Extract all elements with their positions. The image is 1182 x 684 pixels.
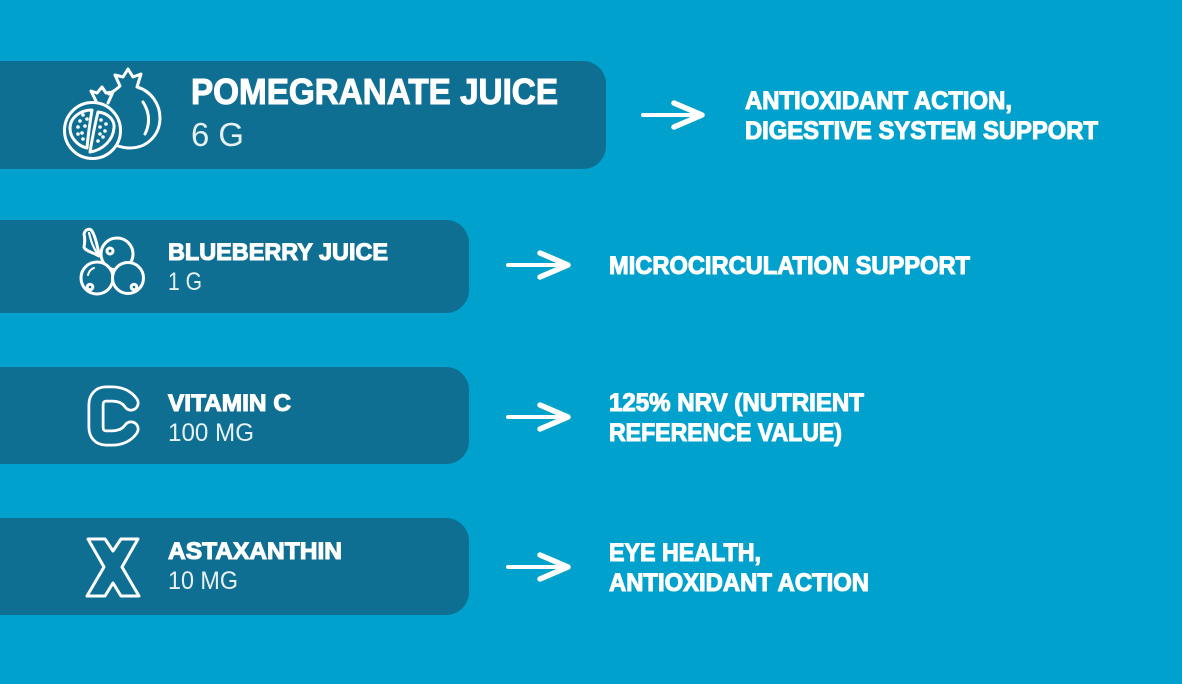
heading: vitamin c: VITAMIN C [168, 390, 291, 417]
benefit text: astaxanthin: EYE HEALTH, [609, 539, 761, 567]
dose: 10 mg: 10 MG [168, 567, 238, 595]
arrow: vitamin c benefit [508, 405, 568, 429]
panel: blueberry juice [0, 220, 469, 313]
heading: pomegranate juice: POMEGRANATE JUICE [191, 71, 558, 112]
benefit text: pomegranate: DIGESTIVE SYSTEM SUPPORT [745, 117, 1098, 145]
icon: pomegranate [64, 69, 160, 158]
benefit text: blueberry: MICROCIRCULATION SUPPORT [609, 252, 970, 280]
benefit text: astaxanthin [609, 539, 869, 597]
arrow: blueberry benefit [508, 253, 568, 277]
panel: pomegranate juice [0, 61, 606, 169]
icon: letter C [96, 394, 131, 438]
panel: astaxanthin [0, 518, 469, 615]
benefit text: vitamin c: 125% NRV (NUTRIENT [609, 389, 864, 417]
heading: blueberry juice: BLUEBERRY JUICE [168, 239, 388, 266]
benefit text: pomegranate: ANTIOXIDANT ACTION, [745, 87, 1012, 115]
benefit text: astaxanthin: ANTIOXIDANT ACTION [609, 569, 869, 597]
dose: 6 g: 6 G [191, 116, 244, 153]
benefit text: vitamin c: REFERENCE VALUE) [609, 419, 842, 447]
heading: astaxanthin: ASTAXANTHIN [168, 538, 342, 565]
dose: 100 mg: 100 MG [168, 419, 254, 447]
icon: blueberries [81, 229, 144, 294]
arrow: astaxanthin benefit [508, 555, 568, 579]
benefit text: vitamin c [609, 389, 864, 447]
panel: vitamin c [0, 367, 469, 464]
dose: 1 g: 1 G [168, 268, 202, 296]
benefit text: pomegranate [745, 87, 1098, 145]
arrow: pomegranate benefit [643, 103, 702, 127]
icon: letter X [87, 539, 139, 596]
